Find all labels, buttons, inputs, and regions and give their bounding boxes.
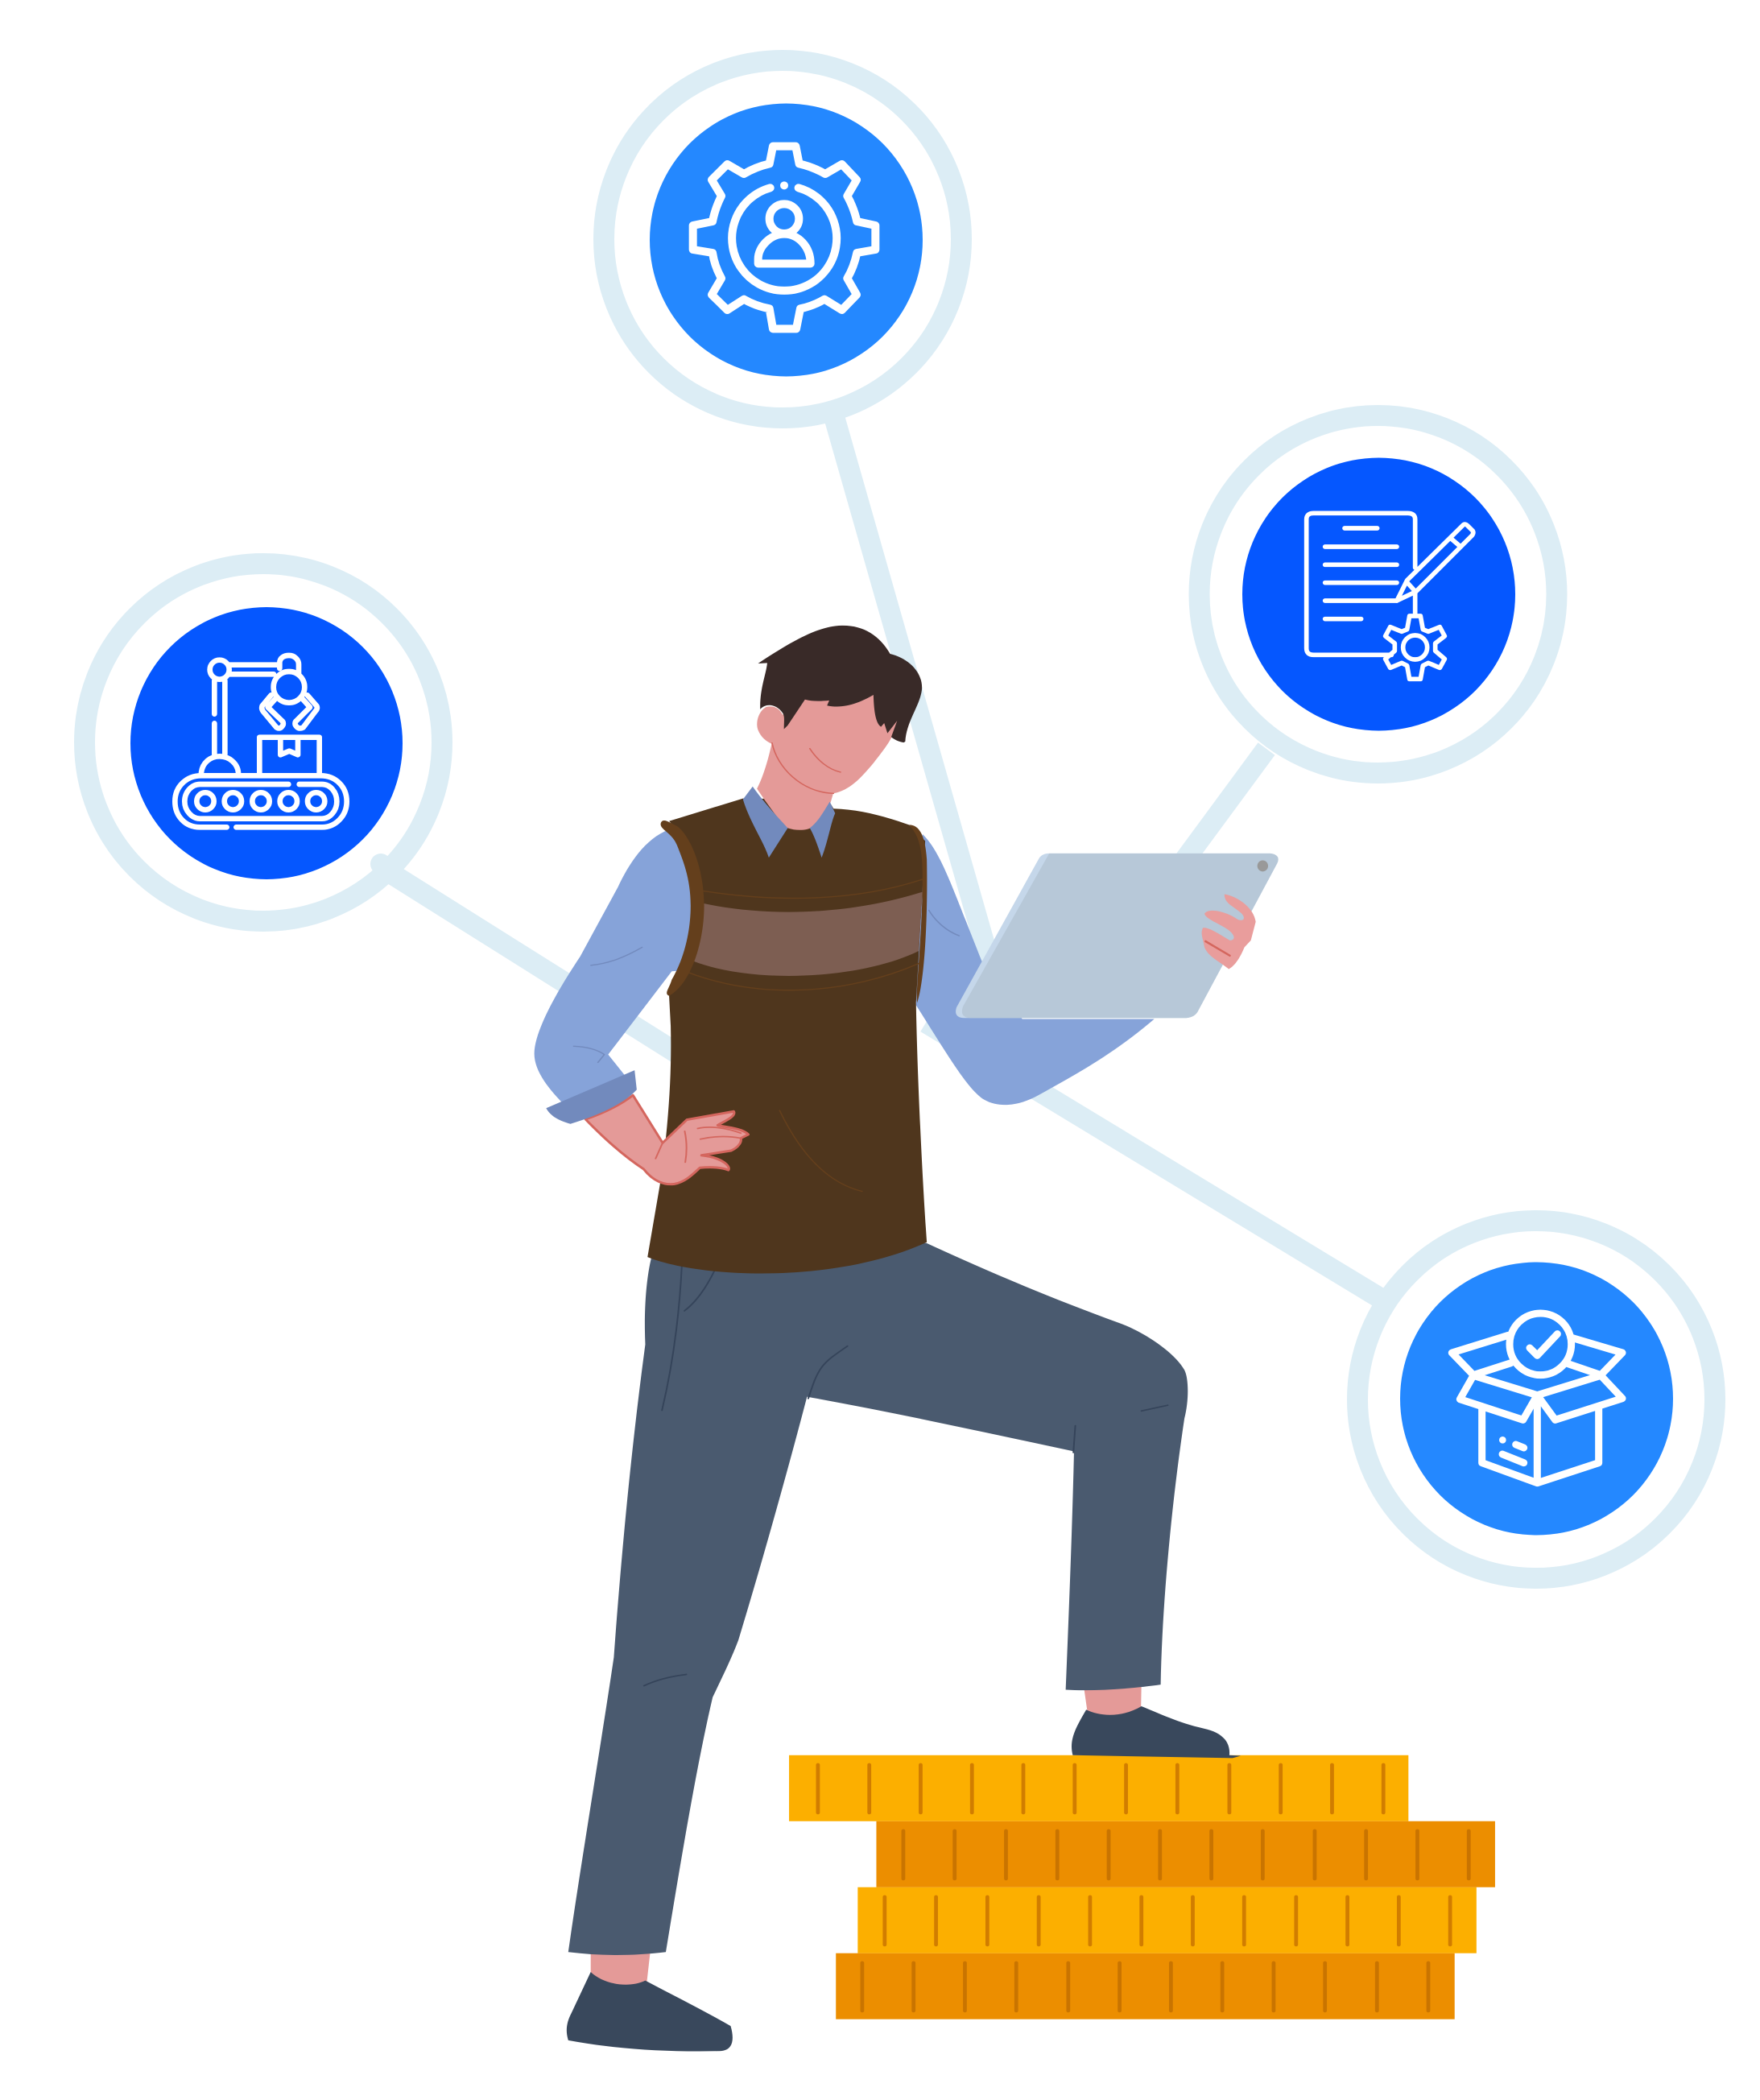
coin: third — [857, 1887, 1477, 1953]
coin: second — [876, 1821, 1495, 1887]
coin: top — [789, 1755, 1408, 1821]
node: open box with check mark — [1357, 1221, 1715, 1578]
tablet — [956, 854, 1279, 1018]
connector lines — [382, 420, 1380, 1298]
face — [757, 693, 899, 793]
coin stack — [789, 1755, 1495, 2019]
shoes — [567, 1706, 1241, 2052]
icon: robotic arm over conveyor belt — [175, 655, 347, 827]
node: robotic arm conveyor — [85, 564, 442, 921]
node: gear with person — [604, 60, 961, 418]
far sleeve — [916, 834, 1155, 1105]
figure: legs and shoes — [567, 1243, 1241, 2052]
hand lines — [655, 1127, 741, 1162]
node: document with pencil and gear — [1200, 415, 1557, 773]
neck — [757, 742, 833, 830]
hair — [758, 626, 922, 742]
cuff — [546, 1070, 637, 1124]
icon: gear with person — [693, 147, 875, 329]
forearm and hand — [585, 1095, 748, 1184]
icon: open box with check mark — [1452, 1313, 1622, 1483]
trousers — [568, 1243, 1188, 1955]
vest — [647, 799, 927, 1273]
ankles — [591, 1685, 1142, 1996]
figure: torso, arms, head and tablet — [535, 626, 1279, 1273]
near sleeve — [535, 829, 704, 1105]
jaw and smile — [772, 743, 841, 793]
trouser folds — [644, 1265, 1167, 1686]
sleeve folds — [574, 911, 959, 1062]
coin: bottom — [836, 1953, 1455, 2019]
icon: document with pencil and gear — [1307, 513, 1473, 679]
hand on tablet — [1202, 894, 1256, 969]
collar — [743, 787, 835, 858]
vest band — [693, 892, 923, 976]
armholes — [661, 821, 927, 1002]
vest stitching — [689, 879, 923, 1192]
